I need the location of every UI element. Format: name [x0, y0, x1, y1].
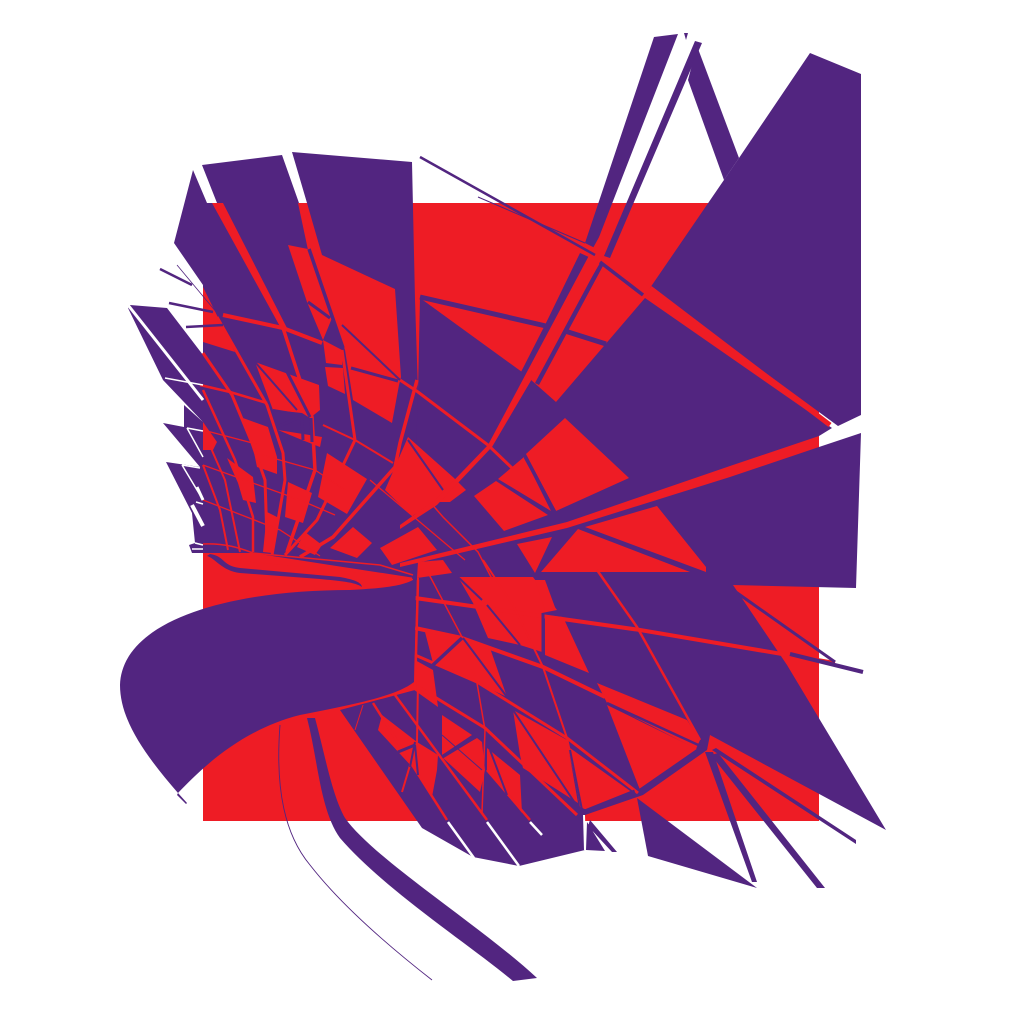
fan curves	[283, 328, 315, 552]
white gaps	[128, 305, 585, 866]
thin tail line	[279, 725, 432, 980]
inverted V and large upper-right shard	[688, 46, 739, 180]
fan rings	[223, 315, 322, 343]
purple shards	[128, 33, 886, 981]
strip beside spike	[400, 230, 615, 529]
thin red top edge	[203, 544, 413, 575]
lower-right wedge and strips	[637, 798, 757, 888]
long right rays	[650, 288, 830, 425]
swoosh cylinder	[120, 578, 416, 793]
tail ribbon	[307, 718, 537, 981]
red gap below band	[203, 553, 413, 640]
red rays	[200, 288, 835, 820]
cylinder top band and swoosh	[120, 544, 416, 793]
red patches	[203, 203, 819, 813]
left fan base	[128, 152, 490, 578]
purple detail lines	[160, 157, 863, 812]
background square	[203, 203, 819, 821]
top spike strips	[585, 34, 678, 248]
central and right base	[340, 298, 886, 866]
swoosh edge	[177, 793, 187, 804]
central ray	[400, 436, 819, 567]
inner line	[207, 554, 362, 587]
